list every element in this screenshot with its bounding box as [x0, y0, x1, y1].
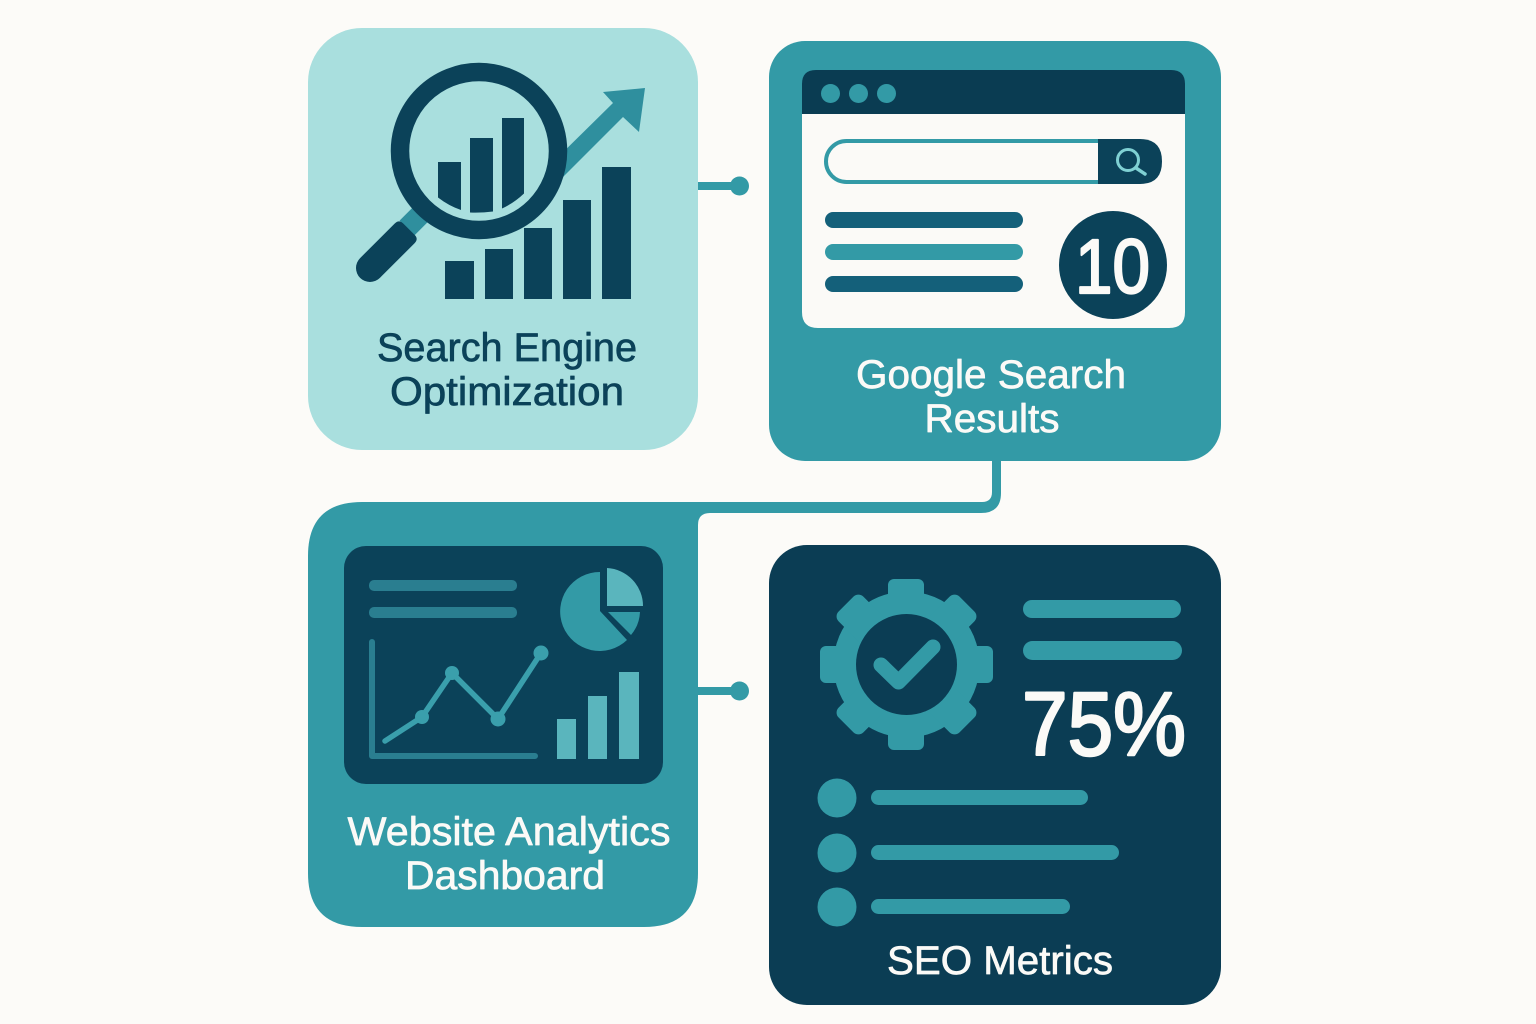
badge: rank 10 — [1059, 211, 1167, 319]
icon: magnifying glass — [350, 72, 558, 288]
connector: SEO to Google Search Results — [698, 176, 749, 196]
panel: SEO Metrics — [769, 545, 1221, 1005]
pie chart — [560, 568, 643, 651]
heading: Search Engine Optimization — [377, 326, 637, 414]
panel: Website Analytics Dashboard — [308, 502, 698, 927]
chart: rising bars — [445, 167, 631, 299]
heading: Google Search Results: Results — [924, 397, 1060, 441]
connector: Website Analytics to SEO Metrics — [698, 682, 749, 700]
heading: SEO Metrics: SEO Metrics — [887, 939, 1113, 983]
panel: Google Search Results — [769, 41, 1221, 461]
result lines — [825, 212, 1023, 292]
connector: Google Search Results to Website Analytics — [690, 458, 1001, 560]
header lines — [369, 580, 517, 618]
badge: rank 10: 10 — [1075, 224, 1150, 310]
dashboard screen — [344, 546, 663, 784]
text lines — [1023, 600, 1182, 660]
icon: growth arrow — [548, 88, 645, 182]
heading: Website Analytics Dashboard: Dashboard — [405, 854, 605, 898]
heading: Google Search Results — [856, 353, 1126, 441]
bullet list — [818, 778, 1119, 926]
heading: Search Engine Optimization: Optimization — [390, 370, 624, 414]
heading: Website Analytics Dashboard: Website Analytics — [348, 810, 670, 854]
heading: Search Engine Optimization: Search Engine — [377, 326, 637, 370]
heading: Google Search Results: Google Search — [856, 353, 1126, 397]
panel: Search Engine Optimization — [308, 28, 698, 450]
line chart — [372, 642, 548, 756]
bar chart — [557, 672, 639, 759]
icon: gear with check — [820, 579, 993, 750]
search bar — [826, 139, 1162, 184]
heading: Website Analytics Dashboard — [348, 810, 670, 898]
stat: 75%: 75% — [1022, 675, 1186, 775]
browser window — [802, 70, 1185, 328]
